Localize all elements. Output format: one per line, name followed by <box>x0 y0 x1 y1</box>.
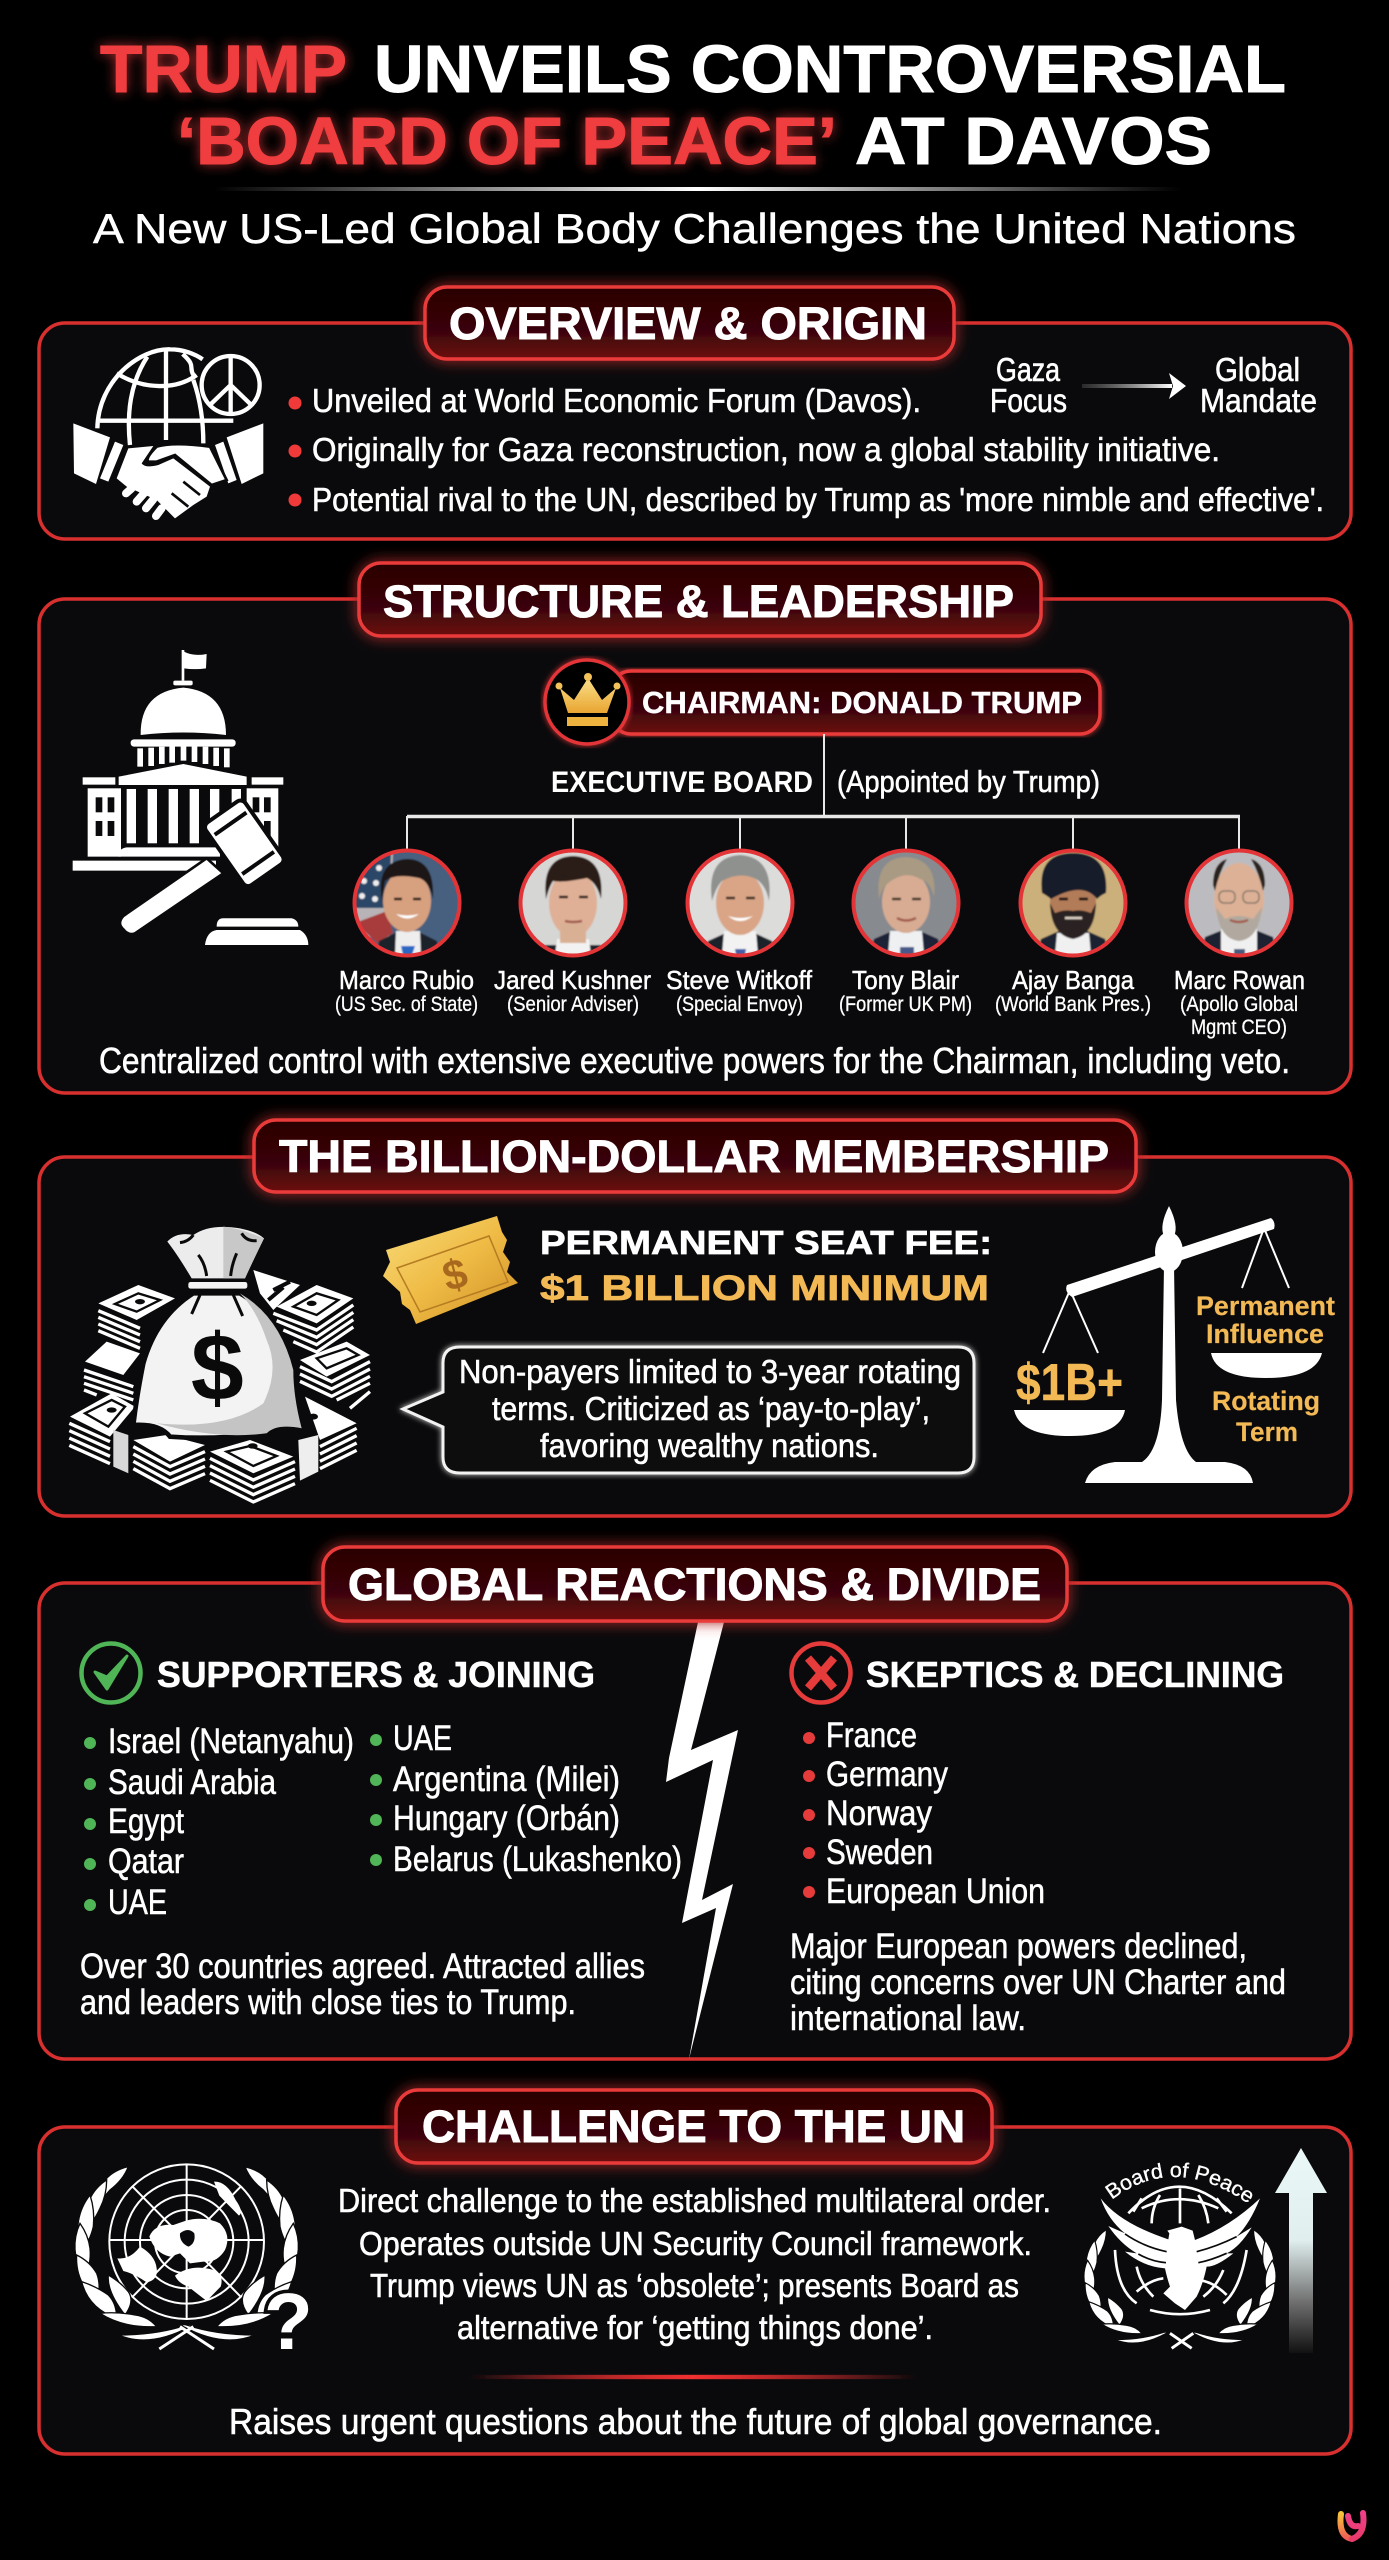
icon: upward arrow <box>1275 2148 1327 2353</box>
lightning bolt divider <box>666 1622 738 2059</box>
skeptics summary: Major European powers declined, <box>790 1927 1247 1966</box>
supporters list: UAE <box>393 1719 452 1758</box>
member names and roles: (Former UK PM) <box>839 993 972 1016</box>
heading: billion-dollar membership <box>254 1120 1136 1192</box>
panel: structure and leadership <box>39 563 1351 1093</box>
fee heading: $1 BILLION MINIMUM <box>540 1269 989 1308</box>
challenge description: Direct challenge to the established multilateral order. <box>338 2182 1051 2219</box>
heading: overview and origin: OVERVIEW & ORIGIN <box>449 298 927 349</box>
challenge divider <box>469 2375 917 2379</box>
member names and roles: (World Bank Pres.) <box>995 993 1151 1016</box>
callout: pay-to-play criticism <box>403 1347 974 1473</box>
icon: weighing scale: Rotating <box>1212 1386 1320 1416</box>
diagram: Gaza focus to global mandate: Focus <box>990 382 1067 419</box>
bullet list: overview: Unveiled at World Economic Forum (Davos). <box>312 382 921 419</box>
title: ‘BOARD OF PEACE’ <box>177 104 837 179</box>
skeptics list <box>803 1716 1045 1911</box>
member names and roles: (Senior Adviser) <box>507 993 639 1016</box>
heading: global reactions and divide: GLOBAL REACTIONS & DIVIDE <box>348 1559 1041 1610</box>
column: supporters <box>80 1644 682 2022</box>
title divider <box>213 187 1182 191</box>
icon: weighing scale: Influence <box>1206 1319 1324 1349</box>
icon: Board of Peace emblem <box>1084 2162 1276 2350</box>
bullet list: overview: Originally for Gaza reconstruction, now a global stability initiative. <box>312 431 1220 468</box>
callout: pay-to-play criticism: terms. Criticized as ‘pay-to-play’, <box>492 1390 930 1427</box>
title: TRUMP <box>100 32 347 107</box>
icon: weighing scale: Permanent <box>1196 1291 1335 1321</box>
column: skeptics: SKEPTICS & DECLINING <box>866 1654 1284 1695</box>
skeptics list: France <box>826 1716 917 1755</box>
supporters list: Qatar <box>108 1842 184 1881</box>
icon: money bag and cash stacks: $ <box>191 1315 244 1421</box>
heading: structure and leadership <box>359 563 1041 636</box>
portrait: Jared Kushner <box>520 850 626 956</box>
member names and roles: Tony Blair <box>852 965 959 995</box>
bullet list: overview: Potential rival to the UN, described by Trump as 'more nimble and effective'. <box>312 481 1324 518</box>
icon: UN emblem with question mark <box>75 2164 313 2366</box>
heading: structure and leadership: STRUCTURE & LEADERSHIP <box>383 576 1014 627</box>
subtitle: A New US-Led Global Body Challenges the United Nations <box>93 205 1296 252</box>
portrait: Marco Rubio <box>354 850 460 956</box>
challenge description <box>338 2182 1051 2346</box>
icon: weighing scale: Term <box>1236 1417 1298 1447</box>
panel frame: membership <box>39 1157 1351 1516</box>
heading: overview and origin <box>425 287 954 359</box>
supporters list: Hungary (Orbán) <box>393 1799 620 1838</box>
icon: red cross <box>792 1644 850 1702</box>
supporters list <box>84 1719 682 1922</box>
supporters summary: and leaders with close ties to Trump. <box>80 1983 576 2022</box>
title: UNVEILS CONTROVERSIAL <box>374 32 1286 107</box>
icon: UN emblem with question mark: ? <box>264 2277 313 2366</box>
supporters list: Saudi Arabia <box>108 1763 276 1802</box>
supporters list: Egypt <box>108 1802 184 1841</box>
executive board label: EXECUTIVE BOARD <box>551 766 813 799</box>
challenge description: Trump views UN as ‘obsolete’; presents Board as <box>370 2267 1019 2304</box>
column: skeptics <box>790 1644 1286 2038</box>
chairman badge: CHAIRMAN: DONALD TRUMP <box>642 685 1082 720</box>
skeptics summary: citing concerns over UN Charter and <box>790 1963 1286 2002</box>
member names and roles: (US Sec. of State) <box>335 993 478 1016</box>
heading: challenge to the UN: CHALLENGE TO THE UN <box>422 2101 965 2152</box>
closing statement: Raises urgent questions about the future of global governance. <box>229 2401 1162 2442</box>
org chart connectors <box>407 734 1240 849</box>
diagram: Gaza focus to global mandate: Global <box>1215 351 1300 388</box>
skeptics summary <box>790 1927 1286 2038</box>
panel frame: structure <box>39 599 1351 1093</box>
supporters summary <box>80 1947 645 2022</box>
icon: globe, peace sign and handshake <box>73 349 263 518</box>
panel frame: overview <box>39 323 1351 539</box>
member names and roles: (Apollo Global <box>1180 993 1298 1016</box>
portrait: Steve Witkoff <box>688 850 792 956</box>
diagram: Gaza focus to global mandate: Mandate <box>1200 382 1317 419</box>
fee heading: PERMANENT SEAT FEE: <box>540 1224 992 1261</box>
executive board label: (Appointed by Trump) <box>837 764 1100 799</box>
skeptics list: Sweden <box>826 1833 933 1872</box>
title <box>100 32 1286 179</box>
panel: challenge to the UN <box>37 2076 1353 2456</box>
panel frame: reactions <box>39 1583 1351 2059</box>
challenge description: Operates outside UN Security Council framework. <box>359 2225 1032 2262</box>
member names and roles: (Special Envoy) <box>676 993 803 1016</box>
portrait: Marc Rowan <box>1186 850 1292 956</box>
supporters list: Belarus (Lukashenko) <box>393 1840 682 1879</box>
supporters list: UAE <box>108 1883 167 1922</box>
diagram: Gaza focus to global mandate: Gaza <box>996 351 1061 388</box>
supporters list: Israel (Netanyahu) <box>108 1722 354 1761</box>
icon: Board of Peace emblem: Board of Peace <box>1104 2162 1252 2202</box>
supporters list: Argentina (Milei) <box>393 1760 620 1799</box>
member names and roles: Marc Rowan <box>1174 965 1305 995</box>
column: supporters: SUPPORTERS & JOINING <box>157 1654 595 1695</box>
panel: billion-dollar membership <box>39 1120 1351 1516</box>
member names and roles: Mgmt CEO) <box>1191 1016 1287 1039</box>
supporters summary: Over 30 countries agreed. Attracted allies <box>80 1947 645 1986</box>
chairman badge <box>545 660 1100 744</box>
member names and roles: Marco Rubio <box>339 965 474 995</box>
heading: challenge to the UN <box>396 2090 992 2163</box>
member names and roles <box>335 965 1305 1039</box>
title: AT DAVOS <box>855 104 1212 179</box>
panel frame: challenge <box>39 2127 1351 2454</box>
icon: gold ticket: $ <box>438 1249 472 1300</box>
panel: global reactions and divide <box>39 1547 1351 2059</box>
icon: capitol and gavel <box>73 650 308 945</box>
portrait: Tony Blair <box>854 850 958 956</box>
skeptics list: Norway <box>826 1794 932 1833</box>
heading: global reactions and divide <box>323 1547 1067 1621</box>
executive board label <box>551 764 1100 799</box>
portrait: Ajay Banga <box>1020 850 1126 956</box>
icon: weighing scale: $1B+ <box>1016 1354 1123 1412</box>
member names and roles: Ajay Banga <box>1012 965 1134 995</box>
panel: overview and origin <box>39 287 1351 539</box>
bullet list: overview <box>288 382 1324 518</box>
member names and roles: Jared Kushner <box>494 965 651 995</box>
icon: gold ticket <box>383 1216 518 1324</box>
heading: billion-dollar membership: THE BILLION-DOLLAR MEMBERSHIP <box>279 1131 1109 1182</box>
callout: pay-to-play criticism: Non-payers limited to 3-year rotating <box>459 1353 961 1390</box>
member names and roles: Steve Witkoff <box>666 965 813 995</box>
callout: pay-to-play criticism: favoring wealthy nations. <box>540 1427 879 1464</box>
skeptics list: Germany <box>826 1755 948 1794</box>
icon: crown <box>545 660 629 744</box>
icon: corner logo <box>1340 2513 1364 2539</box>
icon: weighing scale <box>1014 1206 1335 1483</box>
icon: money bag and cash stacks <box>69 1227 370 1502</box>
challenge description: alternative for ‘getting things done’. <box>457 2309 933 2346</box>
skeptics summary: international law. <box>790 1999 1026 2038</box>
icon: green check <box>82 1644 140 1702</box>
diagram: Gaza focus to global mandate <box>990 351 1317 419</box>
fee heading <box>540 1224 992 1308</box>
skeptics list: European Union <box>826 1872 1045 1911</box>
